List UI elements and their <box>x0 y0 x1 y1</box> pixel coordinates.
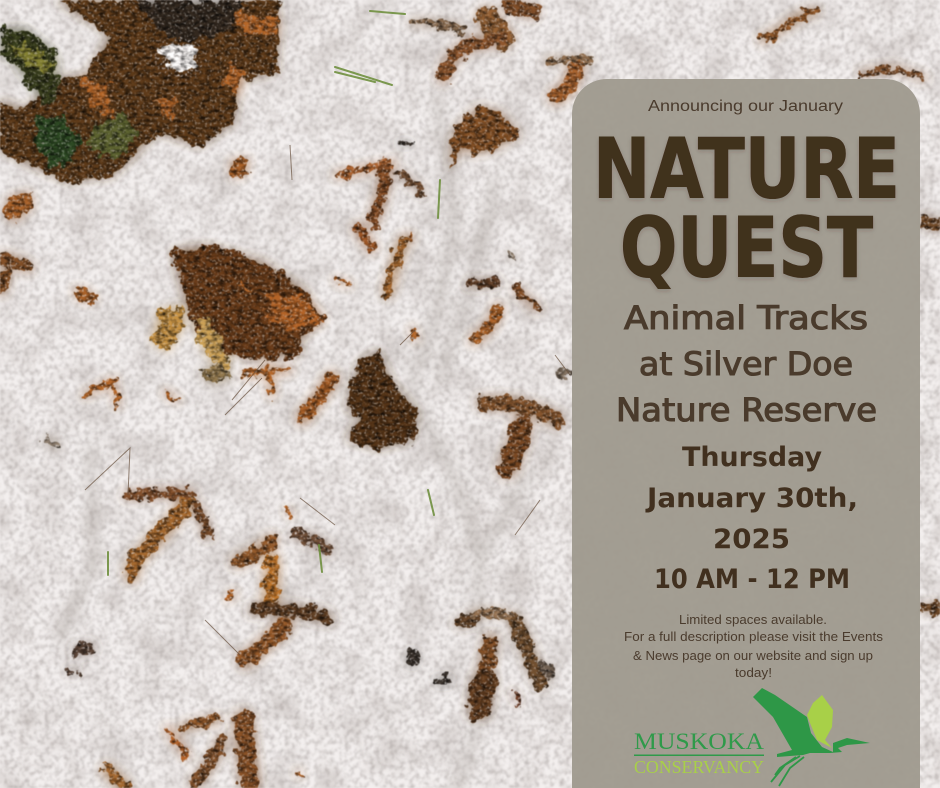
soft shadow lines of tracks in snow <box>60 100 530 788</box>
green grass blades <box>108 11 440 575</box>
logo wordmark <box>634 729 764 777</box>
registration note: Limited spaces available. <box>679 613 827 627</box>
intro line: Announcing our January <box>648 98 843 115</box>
registration note: today! <box>735 666 772 680</box>
registration note: & News page on our website and sign up <box>633 649 873 663</box>
date and time: January 30th, <box>645 483 858 514</box>
logo wordmark: CONSERVANCY <box>634 757 764 777</box>
logo: Muskoka Conservancy <box>634 688 870 786</box>
subtitle: location: Animal Tracks <box>624 299 868 337</box>
panel: event details <box>572 79 920 788</box>
date and time <box>645 442 858 595</box>
title: QUEST <box>620 200 873 296</box>
subtitle: location: Nature Reserve <box>616 391 877 429</box>
date and time: Thursday <box>682 442 822 473</box>
subtitle: location: at Silver Doe <box>639 345 853 383</box>
subtitle: location <box>616 299 877 429</box>
logo wordmark: MUSKOKA <box>634 729 764 754</box>
date and time: 2025 <box>713 524 790 555</box>
title <box>593 120 900 296</box>
icon: heron <box>753 688 870 786</box>
registration note: For a full description please visit the Events <box>624 630 883 644</box>
thin needle strokes <box>85 145 570 655</box>
date and time: 10 AM - 12 PM <box>654 564 850 595</box>
registration note <box>624 613 883 680</box>
